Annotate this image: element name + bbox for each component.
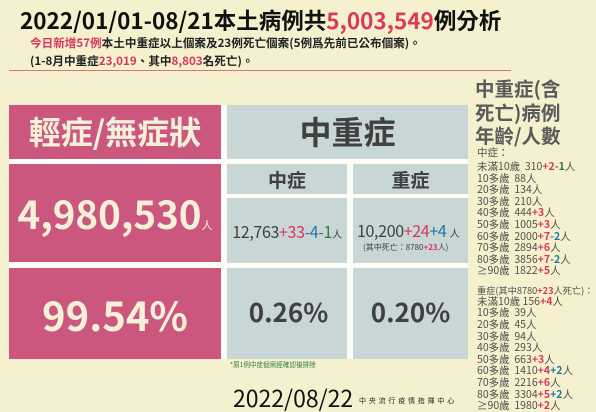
list: moderate cases by age: 60多歲 2000+7-2人 bbox=[477, 229, 571, 244]
list: moderate cases by age: 中症： bbox=[477, 145, 508, 160]
list: severe cases by age: 20多歲 45人 bbox=[477, 317, 537, 332]
panel header: mild or no symptoms: 輕症/無症狀 bbox=[29, 108, 201, 154]
subtitle: today's new cases: 今日新增57例本土中重症以上個案及23例死亡個案(5例爲先前已公布個案)。 bbox=[30, 35, 421, 51]
title: 2022/01/01-08/21本土病例共5,003,549例分析 bbox=[20, 4, 501, 36]
panel: main table bbox=[9, 105, 468, 359]
sidebar heading: age breakdown: 中重症(含 bbox=[475, 73, 560, 102]
list: severe cases by age: 未滿10歲 156+4人 bbox=[477, 294, 563, 309]
list: severe cases by age: 70多歲 2216+6人 bbox=[477, 375, 561, 390]
source: CECC: 中央流行疫情指揮中心 bbox=[359, 396, 457, 406]
list: moderate cases by age: 40多歲 444+3人 bbox=[477, 205, 555, 220]
column header: moderate bbox=[227, 164, 347, 194]
panel header: moderate and severe: 中重症 bbox=[299, 108, 396, 154]
list: severe cases by age: 10多歲 39人 bbox=[477, 305, 537, 320]
list: severe cases by age bbox=[477, 283, 593, 412]
list: moderate cases by age: 80多歲 3856+7-2人 bbox=[477, 252, 571, 267]
sidebar heading: age breakdown bbox=[475, 73, 561, 149]
list: severe cases by age: 80多歲 3304+5+2人 bbox=[477, 387, 573, 402]
list: moderate cases by age: 70多歲 2894+6人 bbox=[477, 240, 561, 255]
cell: severe percentage: 0.20% bbox=[371, 293, 450, 330]
panel header: mild or no symptoms bbox=[9, 105, 221, 159]
header rule bbox=[9, 70, 511, 71]
footnote: *原1例中症個案經確認後排除 bbox=[230, 359, 316, 369]
list: moderate cases by age: 30多歲 210人 bbox=[477, 194, 542, 209]
list: severe cases by age: 50多歲 663+3人 bbox=[477, 352, 555, 367]
subtitle: monthly totals: (1-8月中重症23,019、其中8,803名死亡)。 bbox=[30, 53, 253, 69]
list: moderate cases by age: 未滿10歲 310+2-1人 bbox=[477, 159, 575, 174]
column header: moderate: 中症 bbox=[268, 166, 306, 193]
list: moderate cases by age bbox=[477, 145, 575, 278]
cell: moderate percentage: 0.26% bbox=[249, 293, 328, 330]
sidebar heading: age breakdown: 死亡)病例 bbox=[475, 96, 560, 126]
severe deaths note: (其中死亡：8780+23人) bbox=[363, 242, 448, 253]
severe count: 10,200+24+4 人 bbox=[357, 218, 459, 242]
panel value: mild percentage bbox=[9, 268, 221, 359]
panel value: mild percentage: 99.54% bbox=[42, 285, 188, 343]
list: moderate cases by age: 20多歲 134人 bbox=[477, 182, 542, 197]
panel value: mild case count bbox=[9, 164, 221, 262]
list: moderate cases by age: ≥90歲 1822+5人 bbox=[477, 263, 561, 278]
column header: severe: 重症 bbox=[391, 166, 430, 193]
column header: severe bbox=[353, 164, 468, 194]
cell: moderate count bbox=[227, 198, 347, 263]
cell: moderate percentage bbox=[227, 268, 347, 359]
list: severe cases by age: 30多歲 94人 bbox=[477, 329, 537, 344]
list: severe cases by age: 60多歲 1410+4+2人 bbox=[477, 363, 573, 378]
cell: severe count and deaths bbox=[353, 198, 468, 263]
panel value: mild case count: 4,980,530人 bbox=[17, 185, 213, 241]
sidebar heading: age breakdown: 年齡/人數 bbox=[475, 120, 561, 149]
list: moderate cases by age: 10多歲 88人 bbox=[477, 171, 537, 186]
cell: severe percentage bbox=[353, 268, 468, 359]
list: severe cases by age: 重症(其中8780+23人死亡)： bbox=[477, 283, 593, 297]
panel header: moderate and severe bbox=[227, 105, 468, 159]
list: severe cases by age: 40多歲 293人 bbox=[477, 340, 542, 355]
cell: moderate count: 12,763+33-4-1人 bbox=[232, 219, 342, 243]
list: moderate cases by age: 50多歲 1005+3人 bbox=[477, 217, 561, 232]
